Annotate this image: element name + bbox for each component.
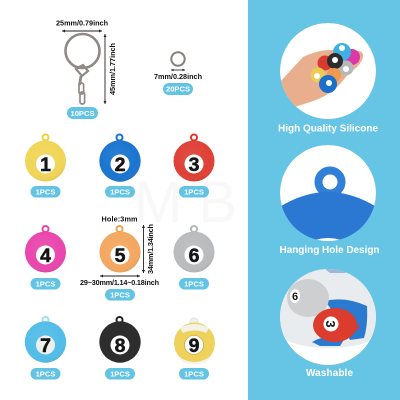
ball 2 blue	[99, 134, 141, 198]
hand	[281, 50, 364, 107]
ball 1 yellow: 1	[40, 154, 51, 176]
ball 8 black: 8	[115, 335, 126, 357]
pill: ball 5: 1PCS	[110, 290, 130, 300]
photo: balls in water glass: 3	[323, 320, 338, 328]
ball 5 orange: 5	[115, 245, 126, 267]
dimension: ball height: 34mm/1.34inch	[146, 224, 155, 274]
ball 2 blue: 2	[115, 154, 126, 176]
feature: washable	[280, 269, 376, 379]
dimension: jump ring width: 7mm/0.28inch	[154, 72, 202, 81]
caption: High Quality Silicone	[278, 124, 378, 134]
photo: hanging loop close-up	[278, 145, 378, 245]
dimension: ring width: 25mm/0.79inch	[56, 18, 108, 28]
ball 9 yellow striped: 9	[189, 335, 200, 357]
ball 7 light blue: 7	[40, 335, 51, 357]
key ring with dimensions	[56, 18, 117, 119]
dimension: hole: Hole:3mm	[102, 214, 138, 224]
watermark: M B	[134, 170, 237, 235]
balls in hand	[310, 43, 360, 93]
glass with water	[280, 269, 376, 348]
pill: ball 2: 1PCS	[110, 188, 130, 196]
ball 5 orange	[80, 214, 159, 300]
dimension: key ring length: 45mm/1.77inch	[108, 43, 117, 95]
photo: hand holding balls	[270, 23, 376, 119]
grey ball	[287, 279, 329, 317]
ball dome	[282, 192, 374, 241]
feature: hanging hole design	[278, 145, 380, 256]
pill: ball 8: 1PCS	[110, 370, 130, 378]
pill: ball 7: 1PCS	[36, 370, 55, 378]
pill: ball 3: 1PCS	[184, 188, 204, 196]
pill: 20PCS: 20PCS	[166, 84, 190, 94]
photo: balls in water glass	[280, 269, 376, 365]
ball 6 grey: 6	[189, 245, 200, 267]
pill: 10PCS: 10PCS	[70, 109, 95, 118]
ball 8 black	[99, 317, 141, 380]
ball 9 yellow striped	[174, 318, 215, 380]
ball 6 grey	[174, 226, 214, 290]
dimension: ball width: 29~30mm/1.14~0.18inch	[80, 278, 159, 287]
panel: features background	[248, 0, 400, 400]
jump ring with dimensions	[154, 52, 202, 95]
photo: balls in water glass: 6	[292, 291, 298, 303]
icon: jump ring	[171, 52, 185, 66]
pill: ball 1: 1PCS	[36, 188, 55, 196]
feature: high quality silicone	[270, 23, 378, 134]
ball 4 magenta	[25, 226, 66, 290]
ball 4 magenta: 4	[40, 245, 51, 267]
pill: ball 9: 1PCS	[184, 370, 204, 378]
ball 3 red: 3	[189, 154, 200, 176]
red ball	[353, 324, 359, 330]
pill: ball 4: 1PCS	[36, 280, 55, 288]
caption: Hanging Hole Design	[280, 245, 380, 256]
ball 1 yellow	[25, 134, 66, 198]
ball 3 red	[174, 134, 214, 198]
hanging loop	[318, 170, 342, 194]
ball 7 light blue	[25, 317, 66, 380]
caption: Washable	[306, 368, 353, 379]
pill: ball 6: 1PCS	[184, 280, 204, 288]
icon: key ring and chain	[66, 34, 100, 104]
